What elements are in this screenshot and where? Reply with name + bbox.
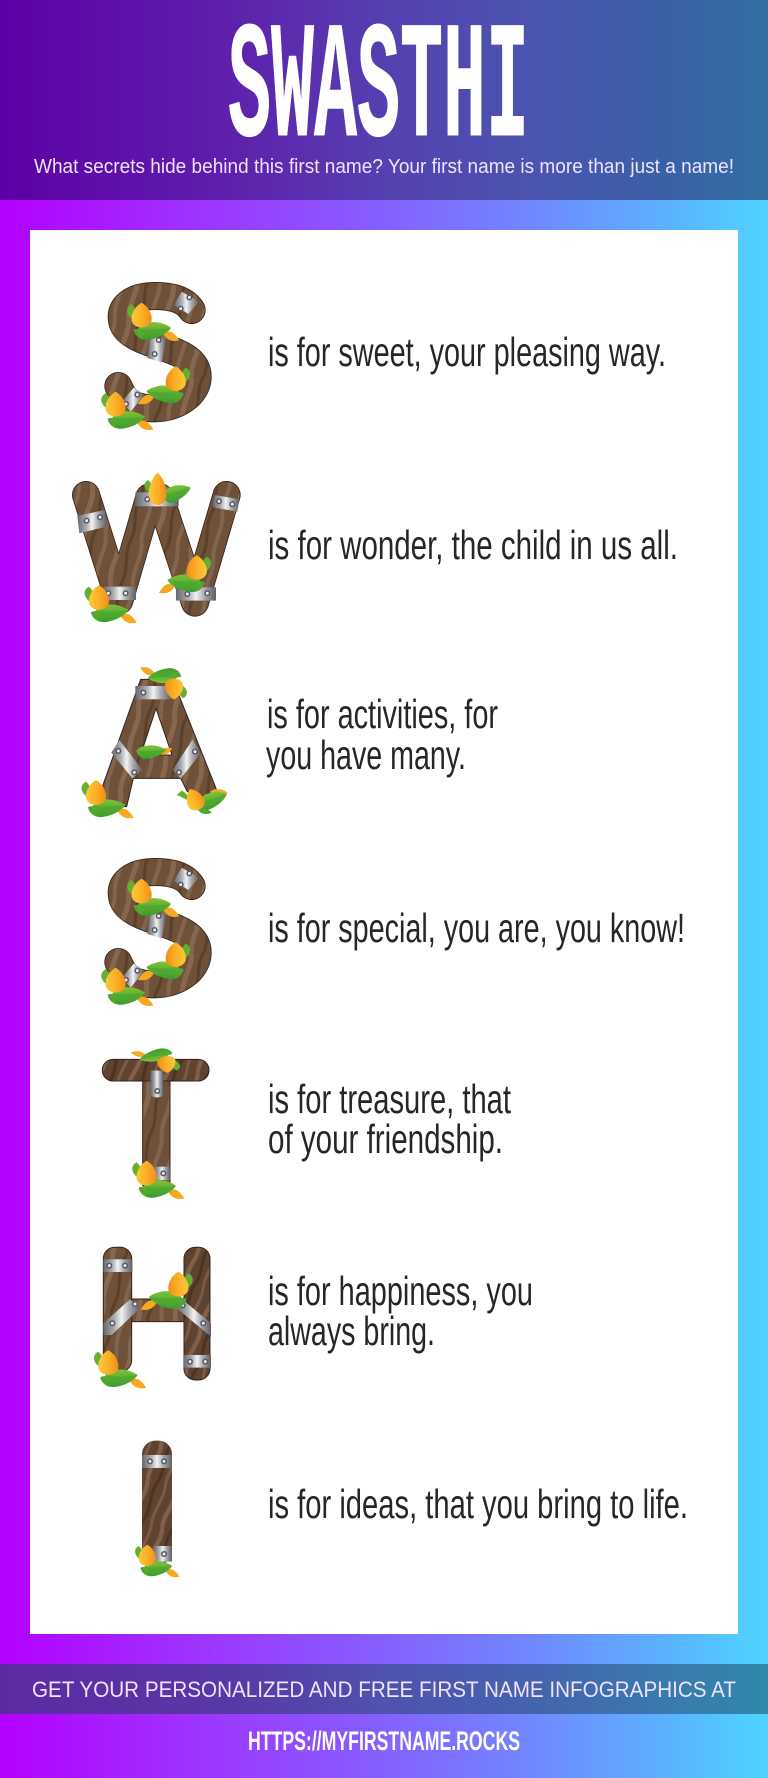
- text: treasure line 1 and 2: is for treasure, that: [268, 1076, 511, 1122]
- text: activities line 1 and 2: is for activities, for: [267, 691, 498, 737]
- icon: wooden letter T: [102, 1045, 209, 1199]
- row: W for wonder: [77, 473, 678, 623]
- text: activities line 1 and 2: you have many.: [266, 732, 466, 778]
- icon: wooden letter A: [82, 667, 229, 818]
- icon: wooden letter H: [94, 1247, 211, 1388]
- row: I for ideas: [135, 1441, 688, 1577]
- row: T for treasure: [102, 1045, 511, 1199]
- icon: wooden letter I: [135, 1441, 179, 1577]
- text: happiness line 1 and 2: is for happiness, you: [268, 1268, 533, 1314]
- text: treasure line 1 and 2: [268, 1076, 511, 1162]
- row: A for activities: [82, 667, 498, 818]
- footer url: HTTPS://MYFIRSTNAME.ROCKS: [248, 1726, 520, 1756]
- text: happiness line 1 and 2: always bring.: [268, 1308, 435, 1354]
- row: S for sweet: [101, 292, 666, 430]
- icon: wooden letter W: [77, 473, 239, 623]
- header band: [0, 0, 768, 200]
- icon: wooden letter S: [101, 868, 199, 1006]
- row: H for happiness: [94, 1247, 533, 1388]
- footer call to action: GET YOUR PERSONALIZED AND FREE FIRST NAME INFOGRAPHICS AT: [32, 1677, 736, 1702]
- text: activities line 1 and 2: [266, 691, 498, 778]
- icon: wooden letter S: [101, 292, 199, 430]
- row: S for special: [101, 868, 685, 1006]
- subtitle: What secrets hide behind this first name? Your first name is more than just a name!: [34, 156, 734, 178]
- text: treasure line 1 and 2: of your friendship.: [268, 1116, 503, 1162]
- text: happiness line 1 and 2: [268, 1268, 533, 1354]
- footer band: [0, 1664, 768, 1714]
- white content panel: [30, 230, 738, 1634]
